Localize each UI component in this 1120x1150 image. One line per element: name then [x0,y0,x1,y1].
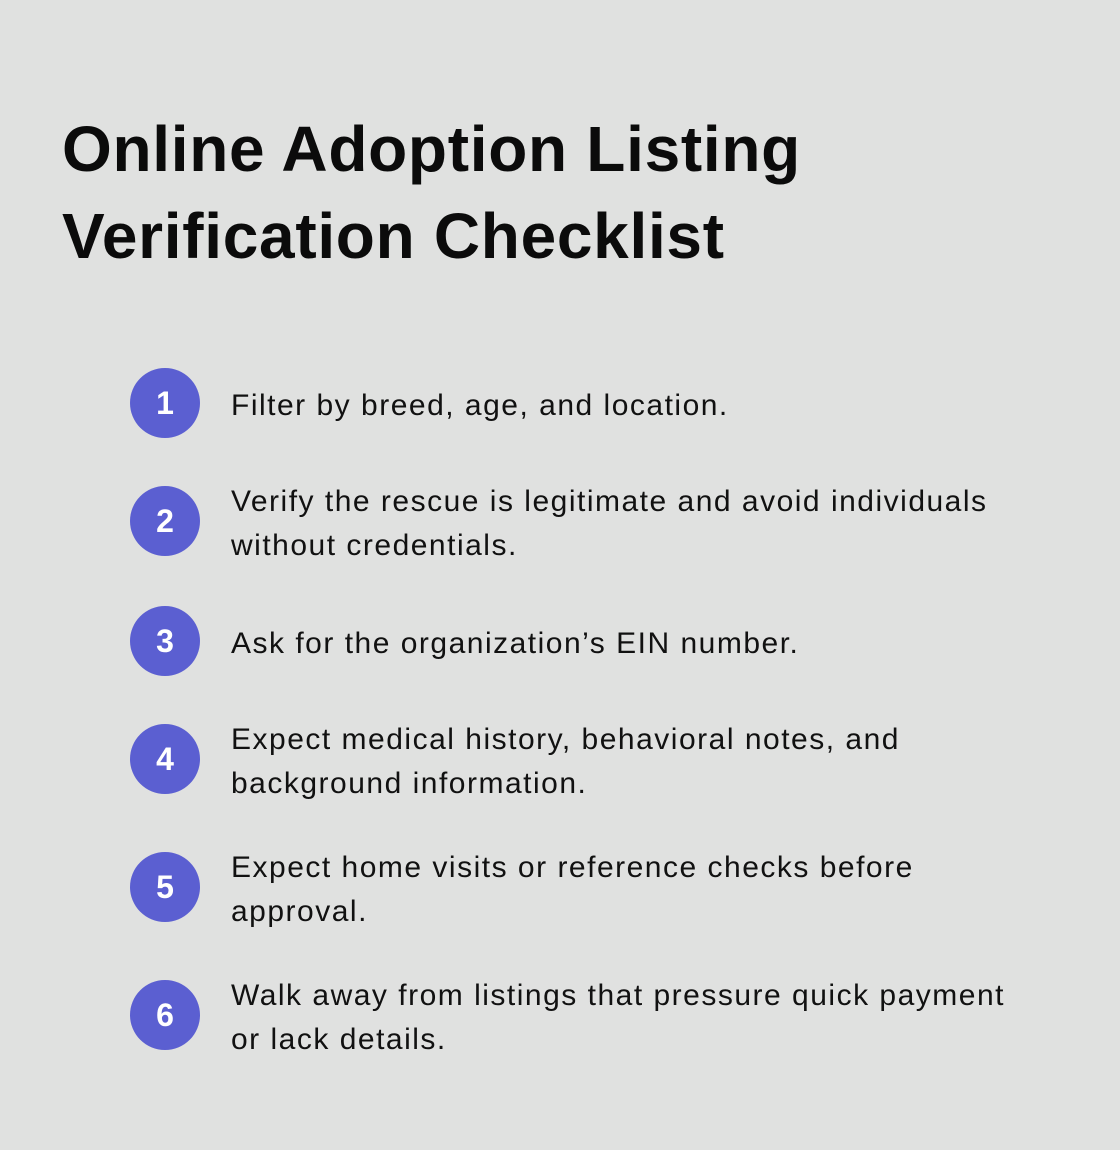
text 4: Expect medical history, behavioral notes, and [231,723,900,756]
icon: number 4 [130,724,200,794]
title: Online Adoption Listing [62,113,801,185]
text 2: without credentials. [231,529,518,562]
text 2 [231,485,988,562]
text 1: Filter by breed, age, and location. [231,389,729,422]
text 5: Expect home visits or reference checks before [231,851,914,884]
text 5: approval. [231,895,368,928]
item 6 [130,979,1005,1056]
item 1 [130,368,729,438]
text 6: or lack details. [231,1023,447,1056]
icon: number 1 [130,368,200,438]
item 5 [130,851,914,928]
text 4 [231,723,900,800]
icon: number 6: 6 [156,996,174,1032]
icon: number 2 [130,486,200,556]
item 4 [130,723,900,800]
icon: number 3 [130,606,200,676]
icon: number 3: 3 [156,622,174,658]
icon: number 4: 4 [156,740,174,776]
icon: number 5 [130,852,200,922]
icon: number 2: 2 [156,502,174,538]
icon: number 5: 5 [156,868,174,904]
title: Verification Checklist [62,200,725,272]
text 4: background information. [231,767,587,800]
text 6 [231,979,1005,1056]
text 2: Verify the rescue is legitimate and avoid individuals [231,485,988,518]
icon: number 1: 1 [156,384,174,420]
title [62,113,801,272]
item 2 [130,485,988,562]
text 5 [231,851,914,928]
text 3: Ask for the organization’s EIN number. [231,627,799,660]
item 3 [130,606,799,676]
text 6: Walk away from listings that pressure quick payment [231,979,1005,1012]
icon: number 6 [130,980,200,1050]
